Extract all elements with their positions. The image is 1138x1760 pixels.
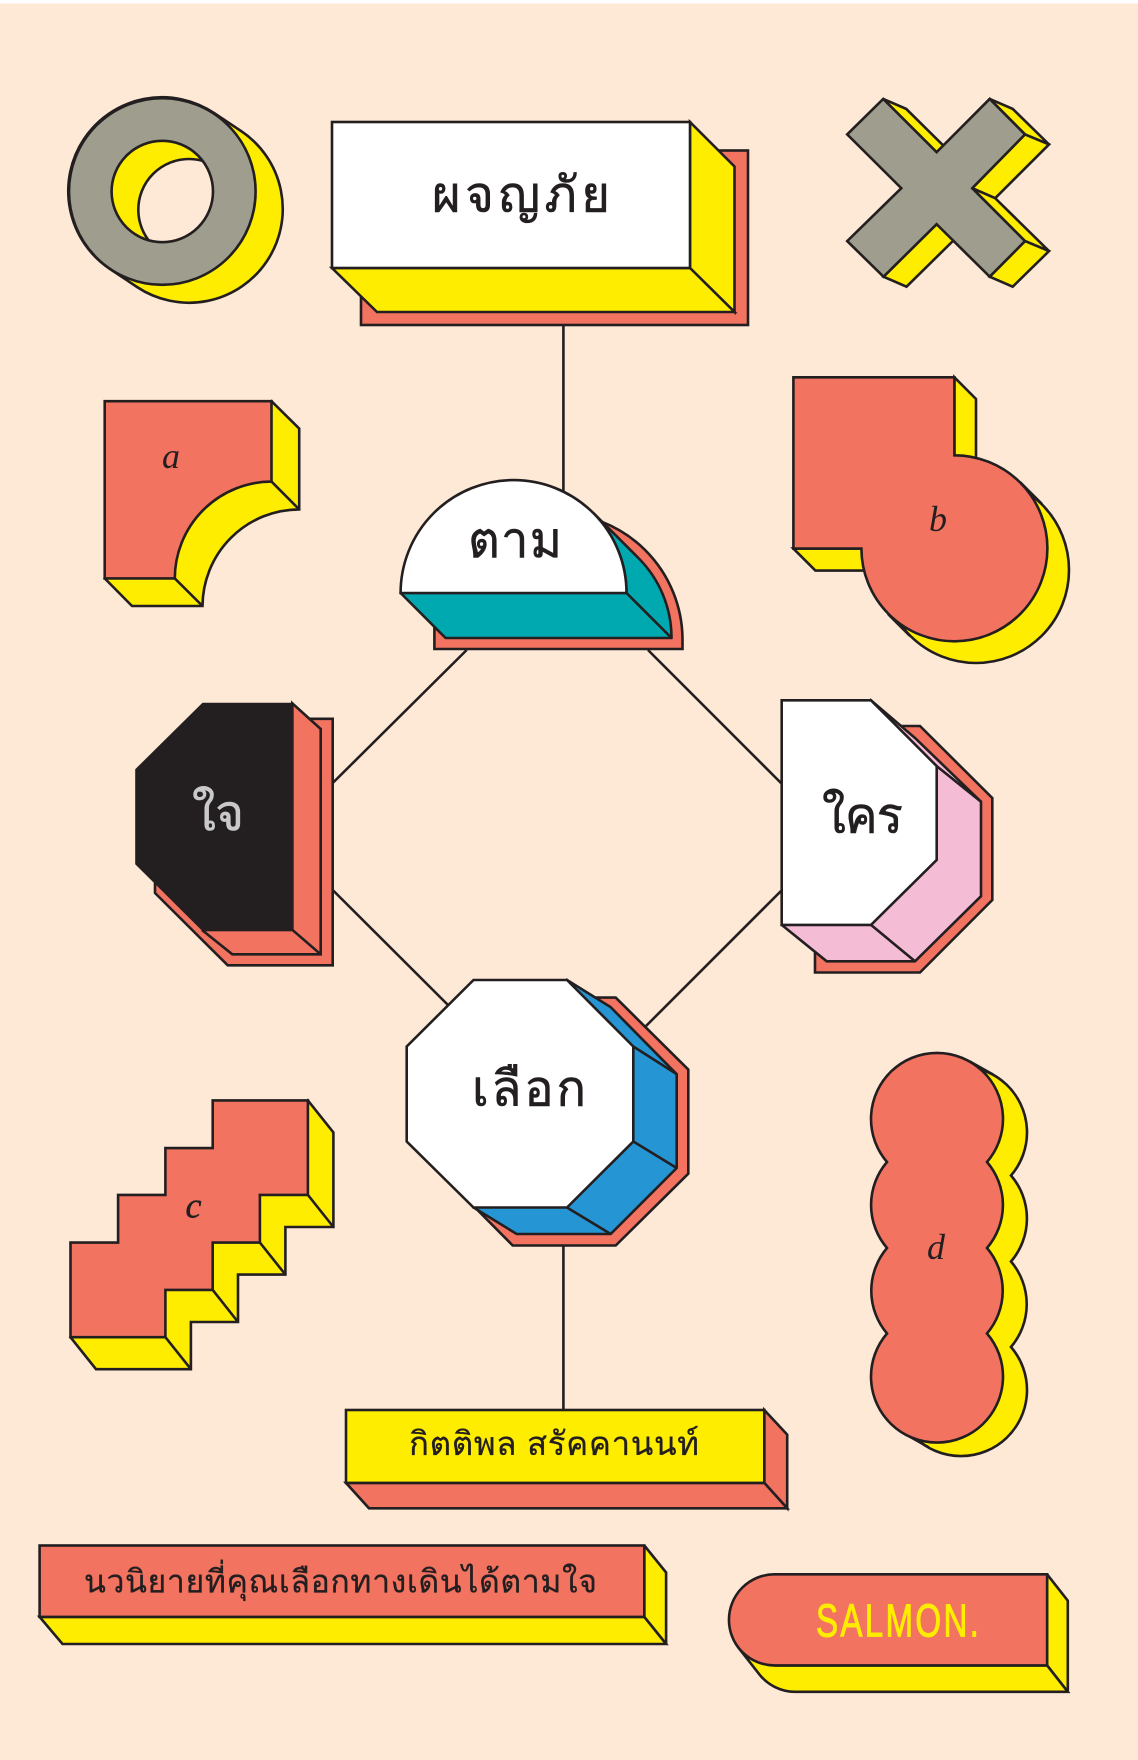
connector: title to ตาม (562, 325, 565, 500)
letter b: b (929, 499, 947, 539)
letter d: d (927, 1227, 946, 1267)
shape b (793, 377, 1069, 663)
node: เลือก white octagon (407, 980, 688, 1246)
publisher text: SALMON. (816, 1596, 981, 1647)
shape c (70, 1100, 333, 1369)
author text: กิตติพล สรัคคานนท์ (409, 1425, 699, 1462)
shape d (871, 1053, 1027, 1456)
letter c: c (186, 1186, 202, 1226)
node: ใคร white octagon (782, 700, 992, 972)
icon: gray X (847, 99, 1049, 287)
ใคร text: ใคร (822, 788, 903, 843)
author block (346, 1410, 787, 1508)
publisher block (729, 1574, 1068, 1692)
connector: ใคร to เลือก (645, 890, 782, 1027)
เลือก text: เลือก (472, 1062, 586, 1116)
node: ตาม dome (401, 480, 682, 649)
node: ใจ black octagon (136, 703, 333, 965)
title block (332, 122, 748, 325)
ใจ text: ใจ (192, 786, 244, 841)
icon: gray ring O (68, 97, 283, 303)
connector: ตาม to ใคร (648, 650, 782, 784)
subtitle text: นวนิยายที่คุณเลือกทางเดินได้ตามใจ (84, 1560, 597, 1602)
connector: ใจ to เลือก (333, 890, 452, 1009)
title text: ผจญภัย (432, 168, 610, 222)
shape a (105, 401, 299, 606)
connector: ตาม to ใจ (333, 650, 467, 783)
letter a: a (162, 436, 180, 476)
ตาม text: ตาม (468, 514, 562, 568)
connector: เลือก to author (562, 1245, 565, 1410)
subtitle block (40, 1546, 666, 1644)
